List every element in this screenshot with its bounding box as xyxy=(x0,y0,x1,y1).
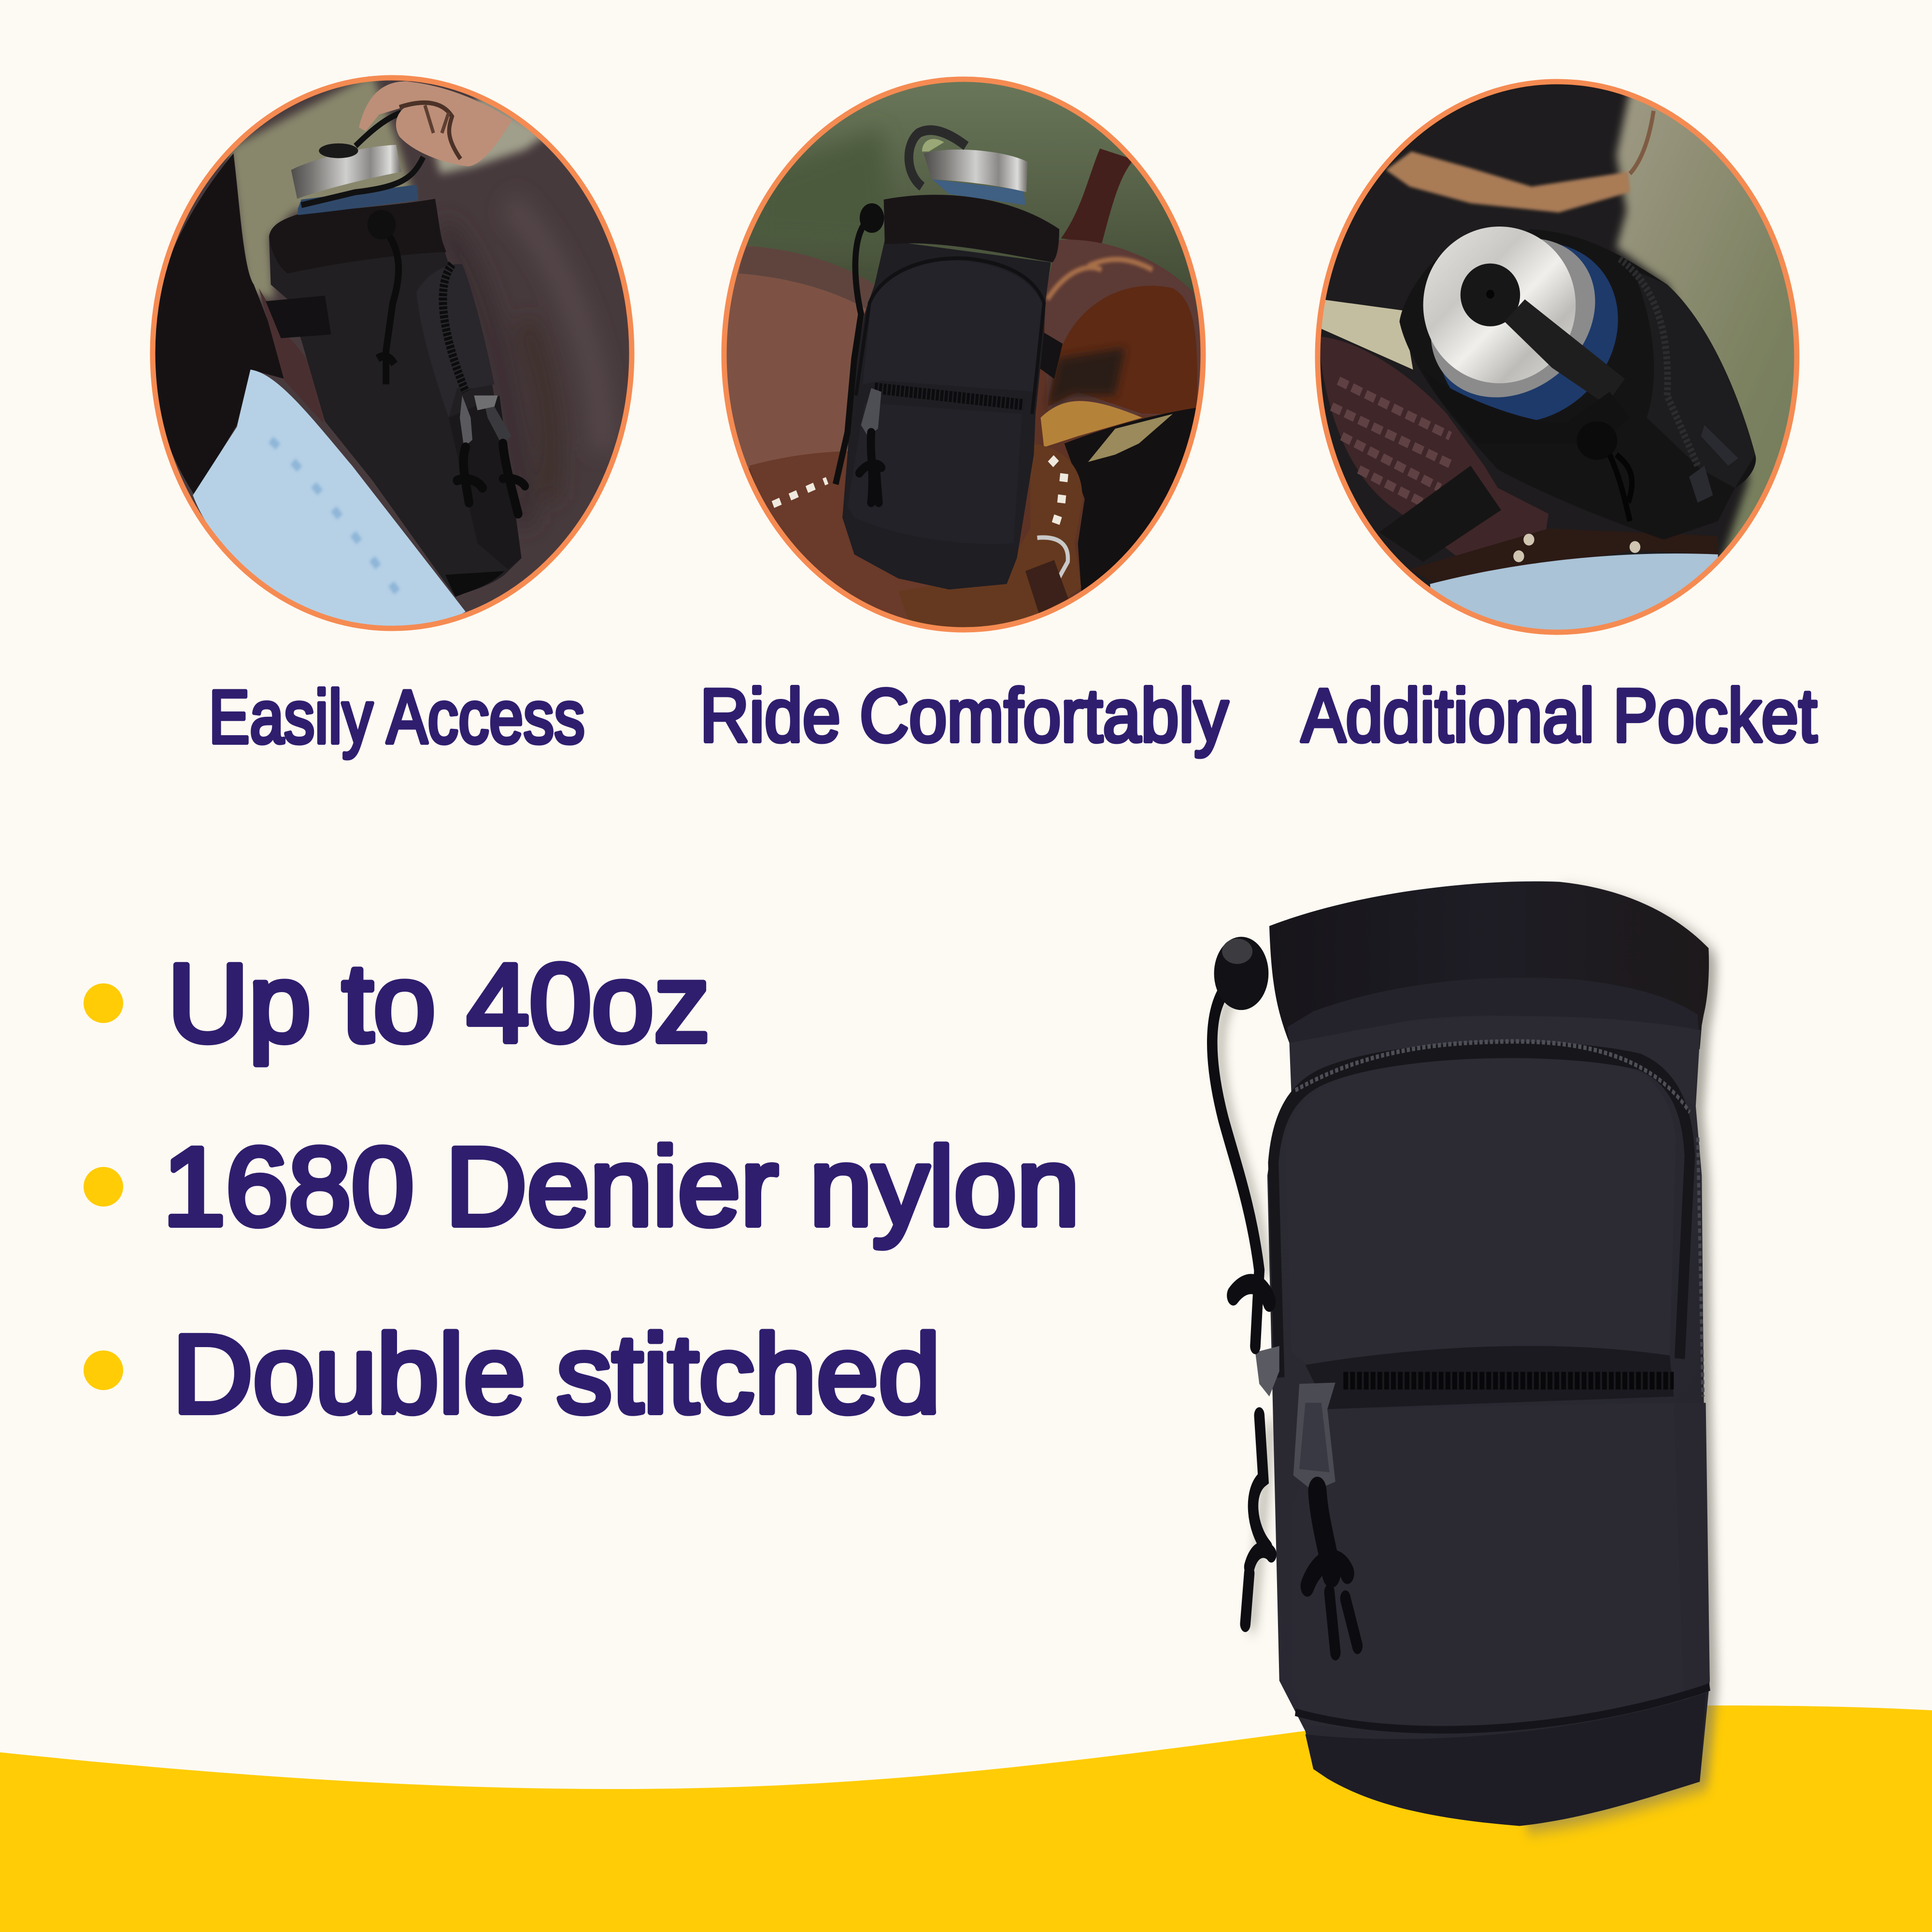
bottle handle xyxy=(301,113,423,205)
upper pocket zipper trim xyxy=(1273,1050,1690,1378)
rein strand upper xyxy=(1630,111,1654,174)
bullet text: Double stitched xyxy=(172,1312,940,1436)
jeans seam xyxy=(271,440,399,595)
tooled leather pommel xyxy=(1044,240,1203,418)
cord stopper bead xyxy=(1214,937,1268,1010)
bottle neck, blue xyxy=(298,185,418,215)
rubber handle loop xyxy=(909,130,966,186)
cord shadow xyxy=(1220,995,1271,1630)
photo border ring xyxy=(1318,82,1797,632)
blue bottle body xyxy=(1408,208,1648,458)
bullet: up to 40oz xyxy=(84,941,710,1065)
main zipper xyxy=(1619,259,1698,466)
tooled leaf highlights xyxy=(1048,259,1152,299)
drawstring xyxy=(1609,455,1632,521)
soft drop shadow xyxy=(1520,888,1718,1832)
fleece lining xyxy=(1040,401,1142,447)
bag strap xyxy=(266,296,331,338)
upper pocket panel xyxy=(863,260,1044,392)
black cap xyxy=(1461,264,1520,327)
gold concho xyxy=(1088,414,1173,462)
heading: additional pocket: Additional Pocket xyxy=(1301,674,1817,758)
dark horse background xyxy=(1294,63,1826,642)
neoprene rim front xyxy=(1423,369,1630,443)
woven saddle leather xyxy=(259,288,324,423)
hand xyxy=(359,81,512,166)
drawstring cord xyxy=(1212,989,1271,1624)
woven leather xyxy=(1318,336,1548,562)
saddle seat left xyxy=(725,244,881,469)
front pocket flap shading xyxy=(1306,1346,1674,1409)
photo backdrop: horse xyxy=(170,80,629,614)
steel lid xyxy=(291,145,401,199)
left drawstring cord xyxy=(836,222,866,484)
steel lid xyxy=(923,150,1028,192)
bullet: double stitched xyxy=(84,1312,940,1436)
front pocket zipper xyxy=(875,388,1023,405)
panel: easily access photo xyxy=(150,75,635,631)
studs xyxy=(1513,534,1640,562)
pocket zipper xyxy=(443,264,466,392)
zipper pulls xyxy=(460,396,511,447)
horse coat streaks xyxy=(440,203,603,525)
steel lid side xyxy=(1404,207,1622,429)
upper fabric band xyxy=(1292,1016,1701,1106)
zipper cords xyxy=(457,443,525,514)
bullet dot xyxy=(84,983,123,1023)
zipper pulls xyxy=(1689,425,1738,503)
gullet shadow xyxy=(1048,347,1125,409)
bag body xyxy=(1399,229,1756,540)
product photo: black bottle bag xyxy=(1212,881,1718,1832)
collar fold highlight xyxy=(1287,978,1700,1049)
white stitching xyxy=(773,481,827,505)
right side seam panel xyxy=(1674,1403,1710,1703)
bag side strap xyxy=(1039,333,1063,379)
upper pocket panel xyxy=(1285,1056,1676,1365)
photo border ring xyxy=(724,79,1203,630)
cord stopper xyxy=(1577,421,1618,460)
pommel gullet xyxy=(1048,286,1197,414)
bullet dot xyxy=(84,1350,123,1390)
dark tree band xyxy=(749,129,895,248)
denim jeans xyxy=(193,369,466,630)
bag body xyxy=(842,240,1051,590)
heading: ride comfortably: Ride Comfortably xyxy=(700,674,1228,758)
bullet text: Up to 40oz xyxy=(168,941,710,1065)
pocket panel xyxy=(1634,270,1755,488)
photo base colour xyxy=(705,284,1236,642)
bag main body xyxy=(1267,999,1710,1826)
front pocket xyxy=(848,403,1022,544)
bag neoprene collar xyxy=(269,199,446,273)
cap dimple xyxy=(1486,290,1494,298)
rider's black shirt xyxy=(156,154,284,494)
lower pocket shadow xyxy=(449,396,522,569)
zipper pull cord and knot xyxy=(1307,1491,1357,1652)
black saddle pad xyxy=(1065,407,1203,591)
blurred field right xyxy=(433,96,549,174)
zipper pull tab xyxy=(1293,1383,1335,1491)
front pocket zipper xyxy=(1343,1374,1674,1388)
panel: ride comfortably photo xyxy=(705,63,1236,642)
photo border ring xyxy=(153,78,632,628)
suede fender lower xyxy=(749,451,976,632)
zipper teeth line right xyxy=(1698,1137,1703,1396)
blurred trees background xyxy=(705,63,1236,322)
keeper strap xyxy=(1025,560,1068,613)
bag body xyxy=(269,199,522,597)
dark saddle strip xyxy=(1410,528,1718,584)
drawstring cord and toggle xyxy=(368,210,398,384)
blurred ground xyxy=(1616,74,1836,580)
yellow wave footer xyxy=(0,1705,1932,1932)
white lacing xyxy=(1051,458,1065,528)
panel: additional pocket photo xyxy=(1294,63,1836,642)
upper pocket xyxy=(416,264,495,418)
bullet text: 1680 Denier nylon xyxy=(163,1124,1080,1249)
upper pocket zipper xyxy=(856,258,1044,414)
neoprene collar xyxy=(1269,881,1709,1049)
bottle neck xyxy=(932,179,1025,205)
saddle cantle rim xyxy=(739,246,875,314)
steel ring xyxy=(1037,538,1068,580)
bullet dot xyxy=(84,1167,123,1207)
base panel xyxy=(1306,1693,1706,1826)
cord stopper xyxy=(860,203,884,233)
bottom seam xyxy=(1295,1687,1710,1730)
black handle xyxy=(1505,299,1625,405)
zipper pull xyxy=(861,388,881,436)
plastic buckle strap xyxy=(1379,466,1501,562)
side zipper hardware xyxy=(1255,1346,1279,1396)
green seen through the loop xyxy=(922,139,944,152)
pale saddle blanket xyxy=(1321,299,1413,369)
bullet: 1680 denier nylon xyxy=(84,1124,1080,1249)
brown strap with stitching xyxy=(898,443,1082,639)
lid cap xyxy=(319,143,358,158)
zipper teeth line top xyxy=(1295,1041,1690,1112)
braided rein xyxy=(1386,152,1630,213)
pull cord knot xyxy=(859,432,881,503)
neoprene collar xyxy=(884,195,1059,262)
heading: easily access: Easily Access xyxy=(209,675,585,759)
front pocket panel xyxy=(1292,1403,1684,1730)
blurred field background xyxy=(230,74,413,299)
bag bottom xyxy=(445,571,505,597)
steel lid top disc xyxy=(1423,227,1576,384)
denim knee xyxy=(1430,554,1718,642)
woven darker texture xyxy=(1332,381,1454,506)
saddle horn xyxy=(1061,149,1134,244)
